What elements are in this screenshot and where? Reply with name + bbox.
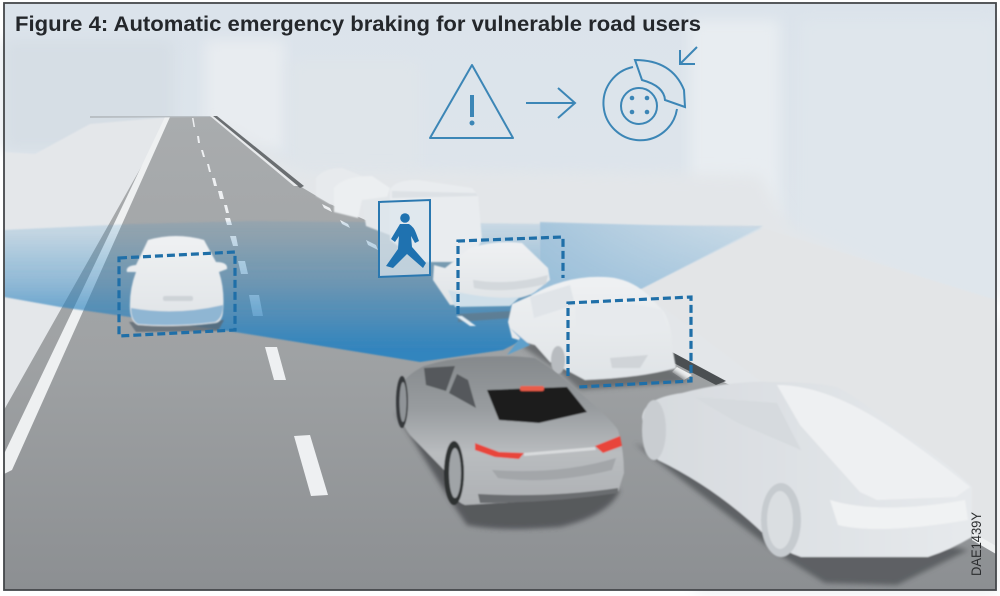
sensor beam	[4, 221, 763, 362]
title: Figure 4: Automatic emergency braking for vulnerable road users	[15, 13, 701, 36]
road edge markings	[4, 116, 996, 554]
pedestrian box	[379, 200, 430, 277]
dashed box: SUV	[568, 297, 691, 387]
ghost car right	[634, 382, 972, 585]
icon: pedestrian	[386, 213, 426, 268]
icon: brake disc	[603, 47, 697, 140]
road	[4, 116, 996, 590]
dashed box: oncoming car	[119, 252, 235, 336]
parked cars far	[316, 168, 482, 262]
arrow	[526, 88, 575, 118]
car: oncoming white car	[127, 236, 227, 332]
lane dashes	[192, 118, 378, 496]
SUV	[507, 277, 690, 390]
ego car grey	[396, 356, 624, 529]
icon: warning triangle	[430, 65, 513, 138]
parked car behind pedestrian	[433, 242, 550, 326]
code label: DAE1439Y	[969, 512, 984, 576]
dashed box: parked car	[458, 237, 563, 314]
